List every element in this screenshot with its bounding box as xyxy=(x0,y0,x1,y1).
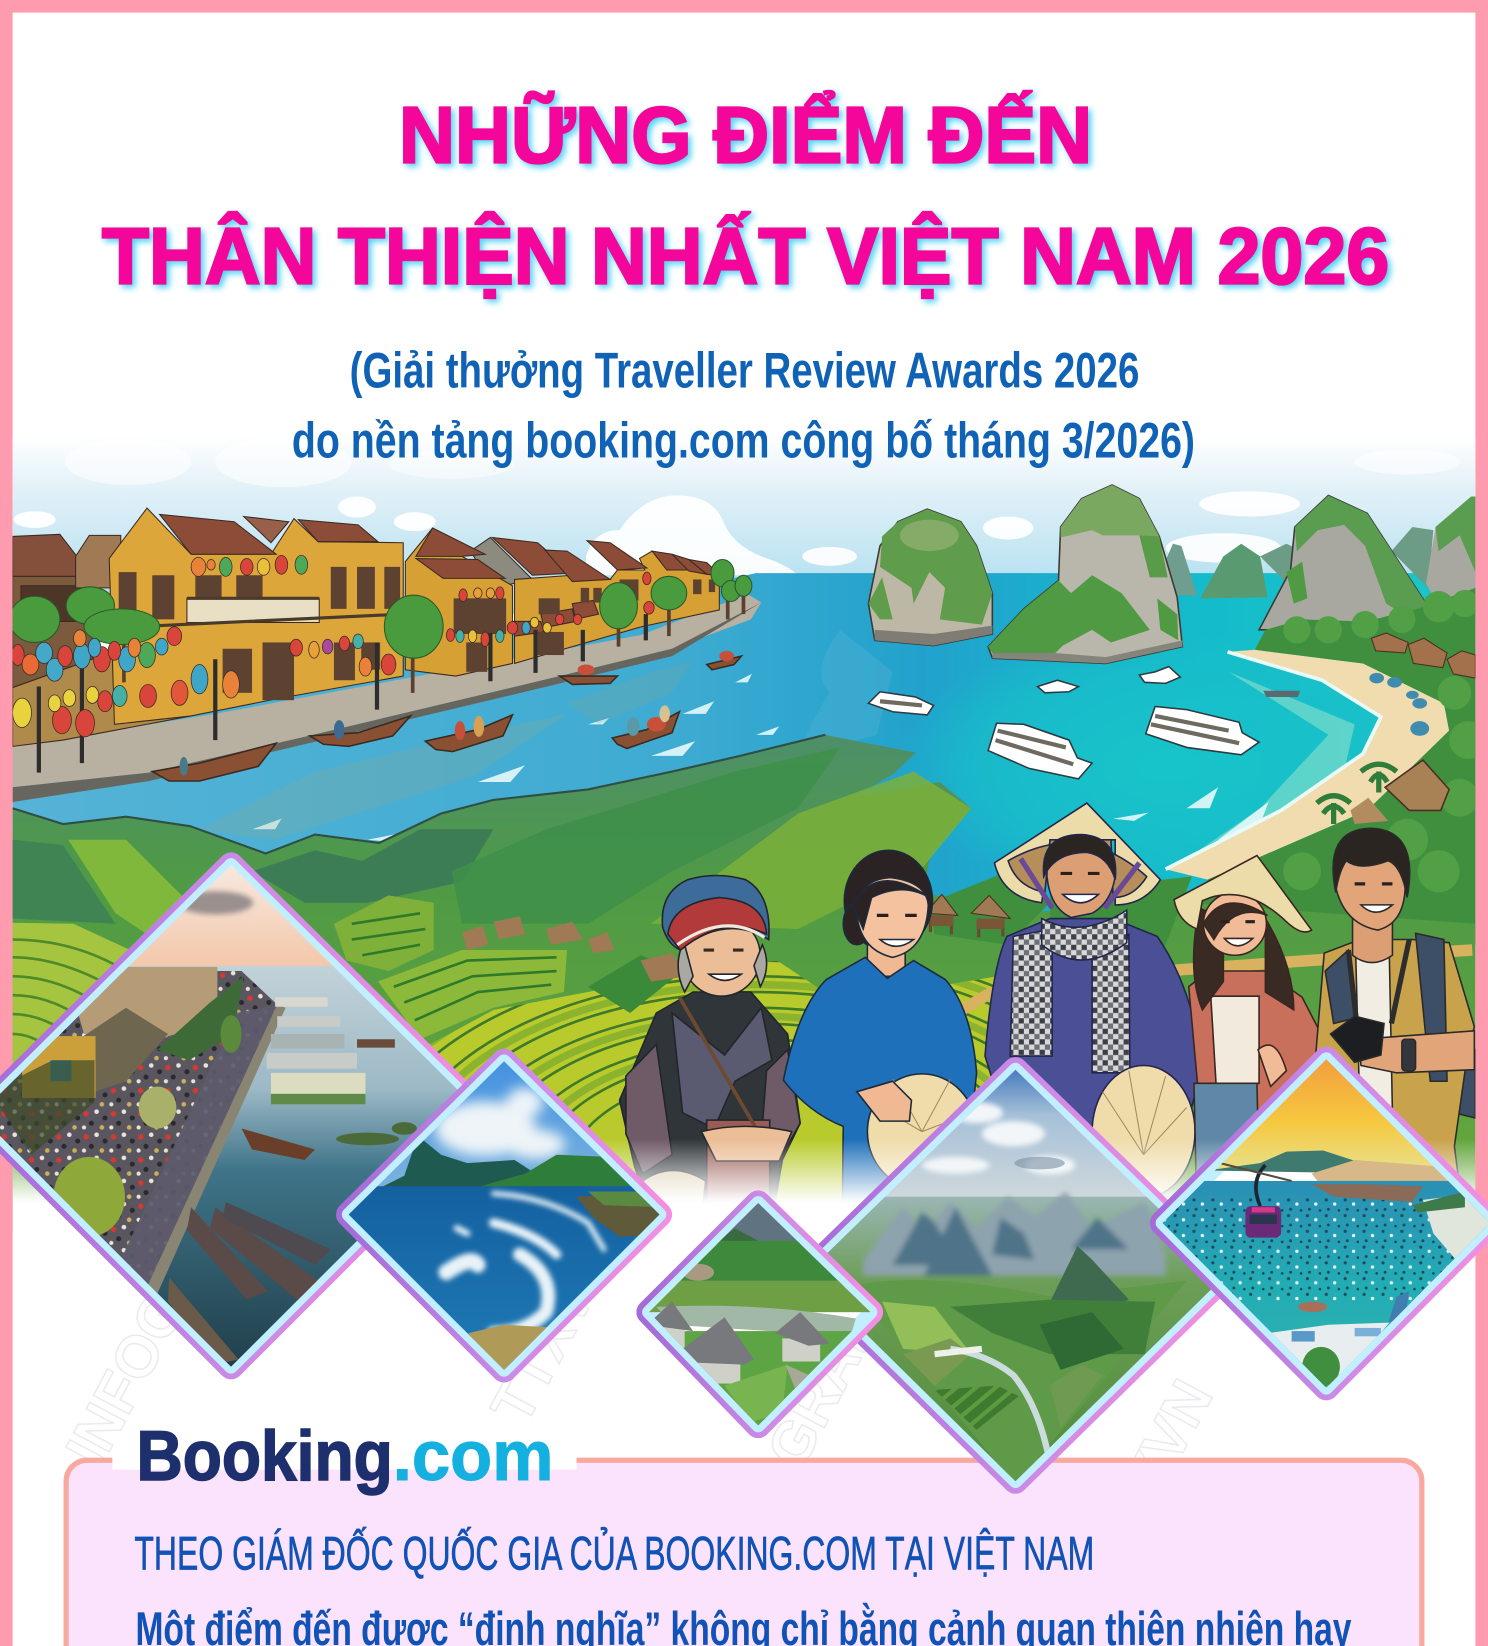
village huts xyxy=(462,916,688,982)
beach bungalows xyxy=(1317,633,1475,824)
karst range and right jungle xyxy=(1202,494,1476,945)
photo diamond 3: Da Lat houses xyxy=(641,1197,877,1431)
sea and river xyxy=(13,573,1475,924)
subtitle: (Giải thưởng Traveller Review Awards 2026 xyxy=(350,341,1139,398)
left brown house xyxy=(13,534,92,688)
photo diamond 1: Hoi An xyxy=(0,856,494,1375)
stilt huts xyxy=(925,894,1010,937)
person: man with conical hat and scarf xyxy=(985,803,1202,1228)
sky xyxy=(13,436,1475,614)
wooden railing xyxy=(962,950,1472,1010)
town and street xyxy=(0,971,276,1284)
panel: Booking.com quote xyxy=(66,1416,1422,1646)
ground behind lanterns xyxy=(13,651,191,746)
photo diamond 4: karst valley xyxy=(798,1065,1239,1491)
title: THÂN THIỆN NHẤT VIỆT NAM 2026 xyxy=(102,211,1389,300)
karst island 1 xyxy=(868,509,992,646)
ridges and slopes xyxy=(13,735,825,853)
old town houses xyxy=(13,508,721,746)
lanterns and trees xyxy=(9,555,752,773)
logo: Booking.com: .com xyxy=(393,1416,553,1495)
ships xyxy=(868,667,1300,779)
title: NHỮNG ĐIỂM ĐẾN xyxy=(399,91,1092,180)
main yellow building xyxy=(109,508,403,724)
watermark: INFOGRAPHICS xyxy=(54,1047,323,1476)
moored boats xyxy=(267,997,357,1069)
subtitle xyxy=(292,341,1195,469)
person: elder ethnic woman xyxy=(620,875,800,1236)
photo diamond 5: cable car over bay xyxy=(1155,1050,1488,1396)
quay xyxy=(13,594,761,802)
title xyxy=(102,91,1389,300)
reflections xyxy=(200,714,567,840)
conical hat held xyxy=(1092,1065,1195,1198)
rice terraces xyxy=(12,895,994,1196)
subtitle: do nền tảng booking.com công bố tháng 3/2026) xyxy=(292,412,1195,469)
person: young woman xyxy=(1173,854,1318,1172)
watermark xyxy=(54,1047,1226,1602)
watermark: TTXVN xyxy=(1078,1370,1226,1570)
photo diamond 2: coast and waves xyxy=(336,1050,672,1386)
logo: Booking.com: Booking xyxy=(137,1416,393,1495)
person: woman in blue ao dai xyxy=(783,850,977,1228)
illustration: Vietnam landscape xyxy=(12,436,1476,1234)
boat figures xyxy=(180,651,734,776)
logo: Booking.com xyxy=(137,1416,553,1495)
wooden boats xyxy=(152,656,741,781)
distant karsts xyxy=(1160,527,1433,598)
green hills xyxy=(13,735,1475,1233)
white fade xyxy=(13,1139,1475,1202)
riverside houses row xyxy=(405,528,721,676)
person: young man with camera xyxy=(1315,828,1476,1174)
conical hat held xyxy=(866,1073,968,1177)
watermark: INFOGRAPHICS xyxy=(689,1173,958,1602)
trees xyxy=(54,1015,242,1237)
distant house behind xyxy=(76,535,121,588)
watermark: TTXVN xyxy=(479,1233,627,1434)
beach xyxy=(1166,650,1449,880)
clouds xyxy=(14,464,1458,576)
karst island 2 xyxy=(988,485,1182,663)
